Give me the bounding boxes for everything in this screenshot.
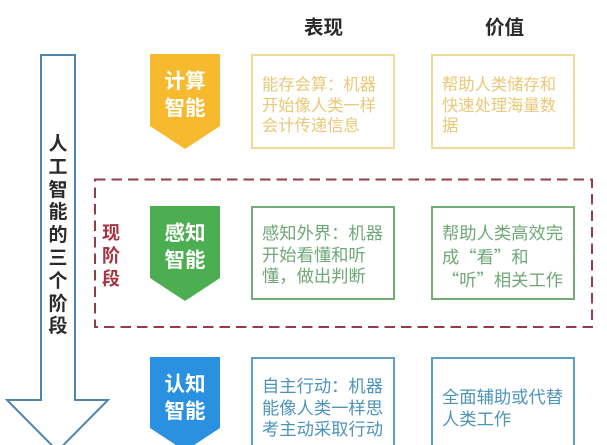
box: 感知 表现: 感知外界：机器 [262,223,383,243]
badge: 感知智能: 感知 [164,222,206,245]
badge: 计算智能 [150,54,220,149]
box: 感知 表现: 开始看懂和听 [262,245,366,265]
label: 现阶段: 现 [102,223,120,243]
arrow label: 的 [48,225,68,246]
dashed panel: current stage [94,178,593,328]
badge: 感知智能: 智能 [164,248,206,272]
badge: 感知智能 [150,206,220,301]
box: 感知 价值: “听”相关工作 [442,266,563,291]
box: 计算 表现: 会计传递信息 [262,117,360,135]
box: 计算 表现 [251,54,395,149]
box: 认知 表现: 能像人类一样思 [262,398,383,418]
arrow: three stages [4,54,110,445]
arrow label: 能 [48,202,68,223]
badge: 认知智能: 认知 [164,373,206,396]
box: 计算 表现: 能存会算：机器 [262,76,376,94]
arrow label: 三 [48,248,68,269]
box: 感知 价值: 帮助人类高效完 [442,223,563,243]
label: 现阶段: 段 [102,269,120,289]
arrow label: 个 [48,271,68,292]
box: 计算 价值 [431,54,575,149]
heading: 价值: 价值 [485,17,524,39]
arrow label: 人 [48,134,68,155]
box: 感知 表现: 懂，做出判断 [262,266,366,286]
box: 认知 表现: 考主动采取行动 [262,419,383,439]
arrow label: 智 [48,180,68,201]
box: 计算 表现: 开始像人类一样 [262,96,376,114]
box: 认知 表现 [251,357,395,445]
box: 认知 价值 [431,357,575,445]
box: 认知 价值: 全面辅助或代替 [442,387,563,407]
box: 计算 价值: 帮助人类储存和 [442,76,556,94]
box: 感知 表现 [251,206,395,300]
box: 计算 价值: 据 [442,117,458,135]
arrow label: 阶 [48,294,68,315]
arrow label [48,134,68,337]
box: 认知 价值: 人类工作 [442,409,511,429]
box: 认知 表现: 自主行动：机器 [262,376,383,396]
badge: 认知智能 [150,357,220,445]
box: 感知 价值 [431,206,575,300]
label: 现阶段: 阶 [102,246,120,266]
badge: 计算智能: 智能 [164,96,206,120]
box: 计算 价值: 快速处理海量数 [442,96,556,114]
box: 感知 价值: 成“看”和 [442,243,528,268]
heading: 表现: 表现 [304,17,343,39]
badge: 计算智能: 计算 [164,70,206,93]
label: 现阶段 [102,223,120,289]
arrow label: 工 [48,157,68,178]
arrow label: 段 [48,316,68,337]
badge: 认知智能: 智能 [164,400,206,422]
